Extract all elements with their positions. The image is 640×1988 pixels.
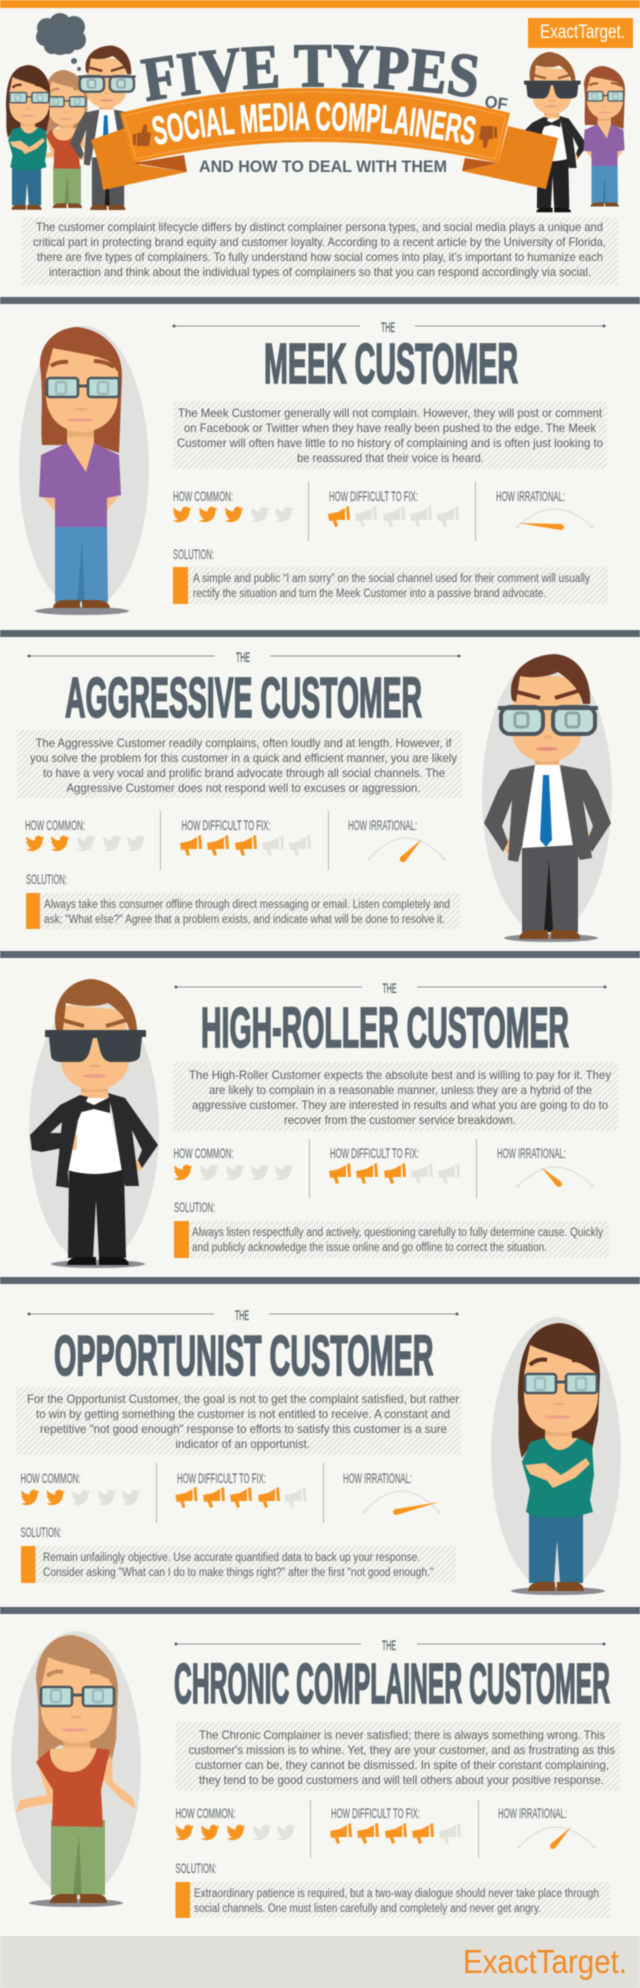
- solution: SOLUTION:: [174, 1199, 215, 1215]
- person: meek small: [584, 66, 625, 206]
- solution: [174, 1199, 609, 1258]
- description: recover from the customer service breakdown.: [284, 1113, 516, 1127]
- panel: aggressive customer: [17, 649, 612, 942]
- description: to win by getting something the customer is not entitled to receive. A constant and: [36, 1407, 450, 1421]
- intro text block: [22, 217, 618, 285]
- rating: how common: [172, 488, 293, 522]
- description: [17, 730, 462, 798]
- rating: how difficult: [176, 1470, 306, 1508]
- description: be reassured that their voice is heard.: [297, 451, 484, 465]
- solution: [176, 1860, 610, 1918]
- solution: SOLUTION:: [20, 1524, 62, 1540]
- subtitle: AND HOW TO DEAL WITH THEM: [199, 157, 447, 176]
- rating: how common: HOW COMMON:: [25, 817, 85, 833]
- description: on Facebook or Twitter when they have really been pushed to the edge. The Meek: [184, 421, 597, 435]
- solution: SOLUTION:: [173, 546, 214, 562]
- title: of: OF: [483, 92, 509, 114]
- intro text block: The customer complaint lifecycle differs by distinct complainer persona types, and social media plays a unique and: [36, 220, 603, 234]
- gauge: how irrational: HOW IRRATIONAL:: [343, 1470, 412, 1486]
- rating: how difficult: HOW DIFFICULT TO FIX:: [182, 817, 270, 833]
- figure backdrop: opportunist: [491, 1317, 621, 1595]
- description: [173, 1062, 618, 1131]
- intro text block: critical part in protecting brand equity and customer loyalty. According to a recent article by the University of Florida,: [33, 235, 606, 249]
- description: are likely to complain in a reasonable manner, unless they are a hybrid of the: [209, 1083, 592, 1097]
- panel: chronic complainer customer: [11, 1631, 620, 1918]
- gauge: how irrational: [343, 1470, 441, 1515]
- gauge: how irrational: [498, 1805, 596, 1849]
- solution: Always take this consumer offline through direct messaging or email. Listen completely and: [44, 899, 450, 911]
- logo: ExactTarget box: [528, 18, 633, 48]
- icon: thought cloud: [36, 13, 86, 71]
- rating: how difficult: [180, 817, 311, 856]
- banner text: SOCIAL MEDIA COMPLAINERS: [152, 101, 477, 146]
- solution: Remain unfailingly objective. Use accurate quantified data to back up your response.: [43, 1552, 420, 1564]
- rating: how difficult: HOW DIFFICULT TO FIX:: [177, 1470, 266, 1486]
- rating: how common: [174, 1145, 293, 1180]
- "the" label: [174, 1637, 606, 1653]
- description: The Aggressive Customer readily complains, often loudly and at length. However, if: [36, 736, 452, 750]
- figure backdrop: meek: [19, 326, 149, 615]
- rating: how common: HOW COMMON:: [20, 1470, 80, 1486]
- rating: how difficult: [329, 1145, 460, 1184]
- figure backdrop: chronic: [11, 1631, 141, 1907]
- intro text block: interaction and think about the individual types of complainers so that you can respond accordingly via social.: [49, 265, 591, 279]
- description: aggressive customer. They are interested in results and what you are going to do to: [192, 1098, 608, 1112]
- description: Customer will often have little to no history of complaining and is often just looking to: [177, 436, 603, 450]
- description: [176, 1722, 620, 1791]
- character: chronic complainer customer: [16, 1635, 136, 1903]
- solution: [173, 546, 608, 604]
- intro text block: there are five types of complainers. To fully understand how social comes into play, it’s important to humanize each: [37, 250, 603, 264]
- rating: how common: [25, 817, 145, 851]
- description: you solve the problem for this customer in a quick and efficient manner, you are likely: [30, 751, 457, 765]
- character: aggressive customer: [484, 654, 611, 939]
- solution: [20, 1524, 456, 1583]
- rating: how common: HOW COMMON:: [174, 1145, 234, 1161]
- description: [16, 1387, 461, 1455]
- panel: meek customer: [19, 319, 608, 615]
- header panel: [5, 12, 634, 285]
- description: repetitive "not good enough" response to efforts to satisfy this customer is a sure: [40, 1422, 447, 1436]
- "the" label: [28, 1307, 458, 1323]
- icon: thumbs up: [133, 124, 151, 146]
- solution: A simple and public “I am sorry” on the social channel used for their comment will usually: [193, 573, 590, 585]
- "the" label: THE: [236, 649, 250, 665]
- rating: how common: HOW COMMON:: [173, 488, 233, 504]
- banner ribbon: [90, 87, 559, 190]
- solution: ask: "What else?" Agree that a problem exists, and indicate what will be done to resolve it.: [44, 914, 445, 926]
- description: they tend to be good customers and will tell others about your positive response.: [199, 1773, 604, 1787]
- "the" label: THE: [381, 319, 395, 335]
- character: high-roller customer: [30, 979, 158, 1265]
- solution: SOLUTION:: [26, 871, 67, 887]
- figure backdrop: high-roller: [29, 995, 159, 1268]
- gauge: how irrational: [497, 1145, 594, 1188]
- "the" label: [28, 649, 460, 665]
- description: For the Opportunist Customer, the goal is not to get the complaint satisfied, but rather: [27, 1392, 459, 1406]
- "the" label: [174, 980, 606, 996]
- rating: how difficult: [330, 1805, 461, 1844]
- description: indicator of an opportunist.: [176, 1437, 310, 1451]
- solution: [26, 871, 460, 929]
- divider bars: [0, 297, 640, 1614]
- person: aggressive small: [70, 46, 143, 210]
- description: [173, 401, 607, 469]
- character: meek customer: [39, 327, 122, 608]
- description: The Meek Customer generally will not complain. However, they will post or comment: [178, 406, 603, 420]
- gauge: how irrational: HOW IRRATIONAL:: [348, 817, 417, 833]
- description: Aggressive Customer does not respond well to excuses or aggression.: [66, 781, 420, 795]
- "the" label: THE: [382, 980, 396, 996]
- gauge: how irrational: HOW IRRATIONAL:: [496, 488, 565, 504]
- rating: how common: [175, 1805, 295, 1840]
- panel: opportunist customer: [16, 1307, 621, 1595]
- "the" label: [172, 319, 606, 335]
- gauge: how irrational: HOW IRRATIONAL:: [497, 1145, 566, 1161]
- rating: how common: HOW COMMON:: [176, 1805, 236, 1821]
- footer: [0, 1936, 640, 1988]
- rating: how common: [20, 1470, 140, 1505]
- rating: how difficult: [328, 488, 459, 527]
- gauge: how irrational: [496, 488, 594, 530]
- "the" label: THE: [235, 1307, 249, 1323]
- panel: high-roller customer: [29, 979, 618, 1268]
- person: opportunist small: [6, 65, 50, 210]
- rating: how difficult: HOW DIFFICULT TO FIX:: [329, 488, 418, 504]
- solution: Consider asking "What can I do to make things right?" after the first "not good enough.": [43, 1567, 434, 1579]
- description: The Chronic Complainer is never satisfied; there is always something wrong. This: [199, 1728, 605, 1742]
- person: high-roller small: [516, 52, 587, 212]
- figure backdrop: aggressive: [482, 655, 612, 942]
- character: opportunist customer: [518, 1323, 600, 1591]
- description: customer's mission is to whine. Yet, they are your customer, and as frustrating as this: [188, 1743, 615, 1757]
- gauge: how irrational: [348, 817, 446, 862]
- description: The High-Roller Customer expects the absolute best and is willing to pay for it. They: [189, 1068, 611, 1082]
- solution: SOLUTION:: [176, 1860, 216, 1876]
- title: five types: FIVE TYPES: [139, 44, 478, 102]
- description: customer can be, they cannot be dismissed. In spite of their constant complaining,: [195, 1758, 609, 1772]
- icon: thumbs down: [479, 126, 497, 148]
- rating: how difficult: HOW DIFFICULT TO FIX:: [331, 1805, 420, 1821]
- solution: social channels. One must listen carefully and completely and never get angry.: [194, 1903, 541, 1915]
- person: chronic complainer small: [35, 70, 97, 208]
- "the" label: THE: [382, 1637, 396, 1653]
- gauge: how irrational: HOW IRRATIONAL:: [498, 1805, 567, 1821]
- solution: and publicly acknowledge the issue online and go offline to correct the situation.: [192, 1242, 547, 1254]
- rating: how difficult: HOW DIFFICULT TO FIX:: [330, 1145, 419, 1161]
- solution: rectify the situation and turn the Meek Customer into a passive brand advocate.: [193, 588, 546, 600]
- top orange band: [0, 0, 640, 8]
- description: to have a very vocal and prolific brand advocate through all social channels. The: [43, 766, 445, 780]
